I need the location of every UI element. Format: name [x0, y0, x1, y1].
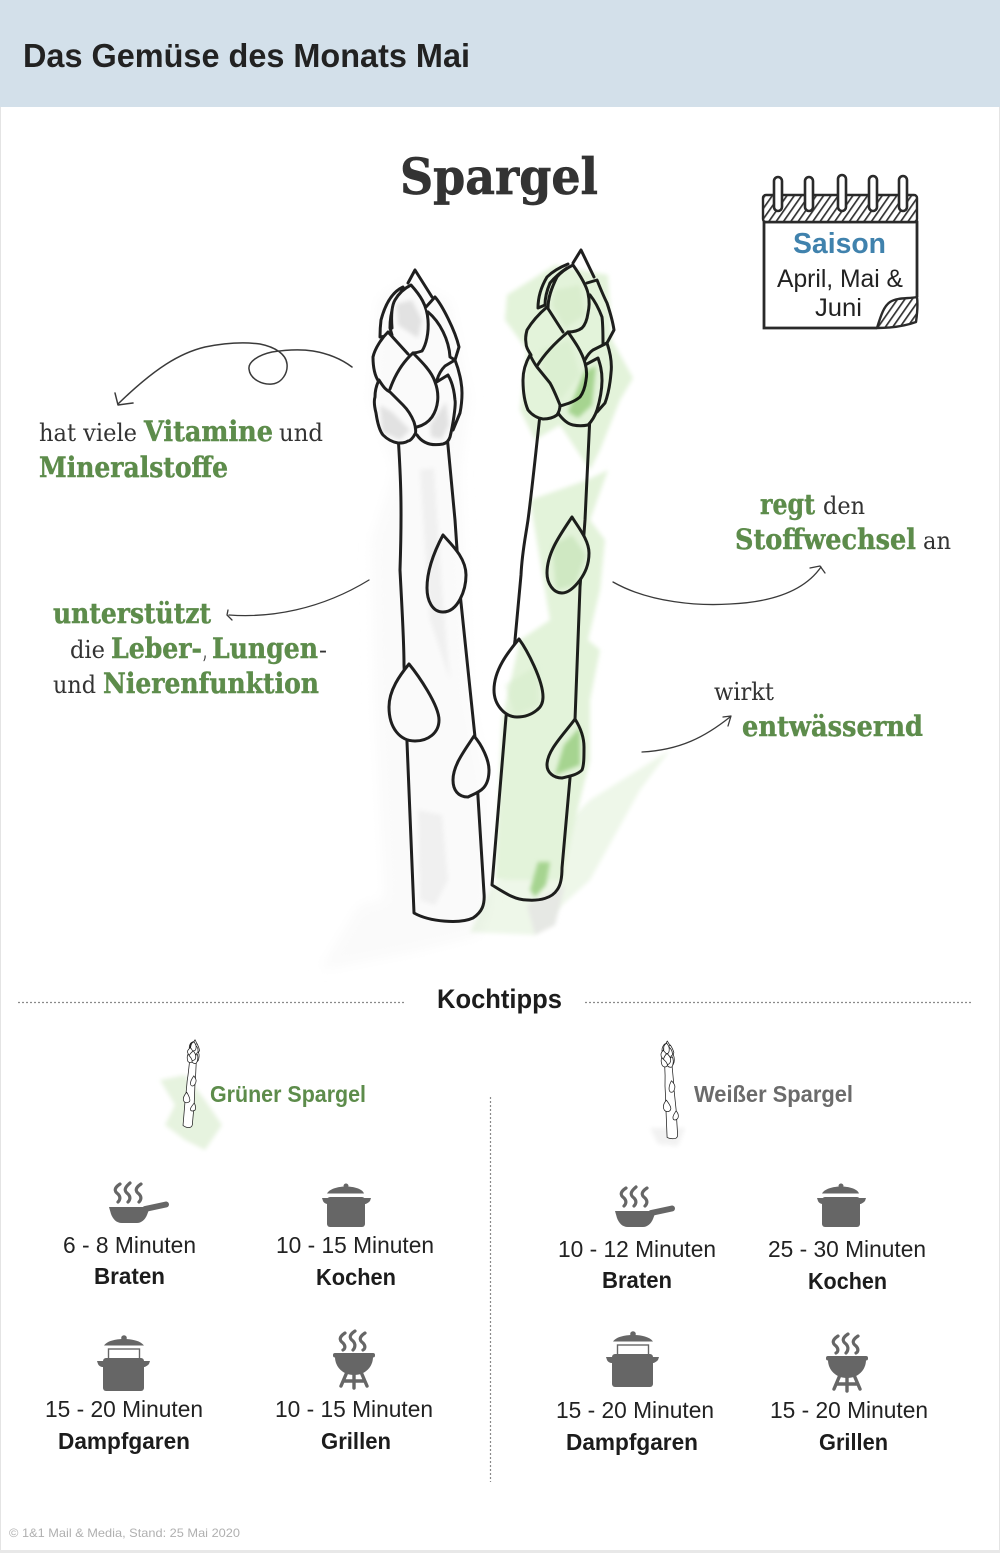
item: Grillen: Grillen	[819, 1429, 888, 1455]
season months	[777, 265, 903, 322]
item: Dampfgaren: Dampfgaren	[58, 1428, 190, 1454]
item: Dampfgaren	[556, 1331, 714, 1455]
item: Braten: Braten	[94, 1263, 165, 1289]
item: Braten: 10 - 12 Minuten	[558, 1236, 716, 1262]
section heading: Kochtipps: Kochtipps	[437, 984, 562, 1014]
item: Kochen: 10 - 15 Minuten	[276, 1232, 434, 1258]
arrow: metabolism	[613, 566, 825, 605]
green asparagus	[470, 250, 670, 935]
callout: Vitamine und Mineralstoffe: und	[279, 419, 323, 447]
item: Braten: Braten	[602, 1267, 672, 1293]
grey watercolour wash	[320, 280, 490, 970]
callout: entwässernd: entwässernd	[742, 710, 923, 743]
callout: Leber-, Lungen- und Nierenfunktion	[53, 597, 327, 700]
callout: Vitamine und Mineralstoffe	[39, 415, 323, 484]
title: Spargel: Spargel	[400, 147, 598, 206]
item: Kochen: Kochen	[808, 1268, 887, 1294]
callout: Leber-, Lungen- und Nierenfunktion: Lungen	[212, 632, 318, 665]
callout: entwässernd	[714, 678, 923, 743]
item: Braten	[558, 1187, 716, 1293]
callout: Stoffwechsel: regt	[760, 488, 815, 521]
item: Kochen	[768, 1184, 926, 1294]
callout: Leber-, Lungen- und Nierenfunktion: Nierenfunktion	[103, 667, 319, 700]
callout: Vitamine und Mineralstoffe: hat viele	[39, 419, 137, 447]
header band	[0, 0, 1000, 107]
icon: small green asparagus	[160, 1040, 222, 1150]
icon: calendar with season	[763, 175, 917, 328]
callout: Stoffwechsel: an	[923, 527, 951, 555]
season heading: Saison	[793, 228, 886, 260]
item: Dampfgaren: 15 - 20 Minuten	[45, 1396, 203, 1422]
heading: Grüner Spargel: Grüner Spargel	[210, 1081, 366, 1107]
item: Grillen: Grillen	[321, 1428, 391, 1454]
callout: entwässernd: wirkt	[714, 678, 774, 706]
item: Dampfgaren	[45, 1335, 203, 1454]
item: Braten	[63, 1183, 196, 1289]
callout: Leber-, Lungen- und Nierenfunktion: die	[70, 636, 105, 664]
panel: green asparagus tips	[45, 1040, 434, 1454]
item: Kochen: Kochen	[316, 1264, 396, 1290]
callout: Leber-, Lungen- und Nierenfunktion: unterstützt	[53, 597, 211, 630]
heading: Weißer Spargel: Weißer Spargel	[694, 1081, 853, 1107]
callout: Leber-, Lungen- und Nierenfunktion: und	[53, 671, 96, 699]
callout: Vitamine und Mineralstoffe: Mineralstoffe	[39, 451, 228, 484]
item: Grillen	[275, 1331, 433, 1454]
arrow: liver	[227, 580, 369, 620]
callout: Stoffwechsel: den	[823, 492, 865, 520]
item: Grillen: 10 - 15 Minuten	[275, 1396, 433, 1422]
item: Grillen	[770, 1334, 928, 1455]
panel: white asparagus tips	[556, 1041, 928, 1455]
item: Braten: 6 - 8 Minuten	[63, 1232, 196, 1258]
season months: April, Mai &	[777, 265, 903, 293]
item: Dampfgaren: Dampfgaren	[566, 1429, 698, 1455]
callout: Leber-, Lungen- und Nierenfunktion: ,	[203, 636, 207, 664]
arrow: diuretic	[642, 716, 731, 752]
callout: Leber-, Lungen- und Nierenfunktion: -	[319, 636, 327, 664]
arrow: vitamins	[115, 343, 352, 405]
callout: Leber-, Lungen- und Nierenfunktion: Leber-	[111, 632, 202, 665]
item: Grillen: 15 - 20 Minuten	[770, 1397, 928, 1423]
callout: Stoffwechsel	[735, 488, 951, 556]
header title: Das Gemüse des Monats Mai	[23, 37, 470, 74]
white asparagus	[320, 270, 490, 970]
season months: Juni	[815, 294, 862, 322]
item: Kochen: 25 - 30 Minuten	[768, 1236, 926, 1262]
callout: Stoffwechsel: Stoffwechsel	[735, 523, 916, 556]
item: Kochen	[276, 1184, 434, 1290]
green watercolour wash	[470, 265, 670, 935]
callout: Vitamine und Mineralstoffe: Vitamine	[143, 415, 273, 448]
item: Dampfgaren: 15 - 20 Minuten	[556, 1397, 714, 1423]
icon: small white asparagus	[650, 1041, 685, 1146]
footer source line: © 1&1 Mail & Media, Stand: 25 Mai 2020	[9, 1526, 240, 1540]
